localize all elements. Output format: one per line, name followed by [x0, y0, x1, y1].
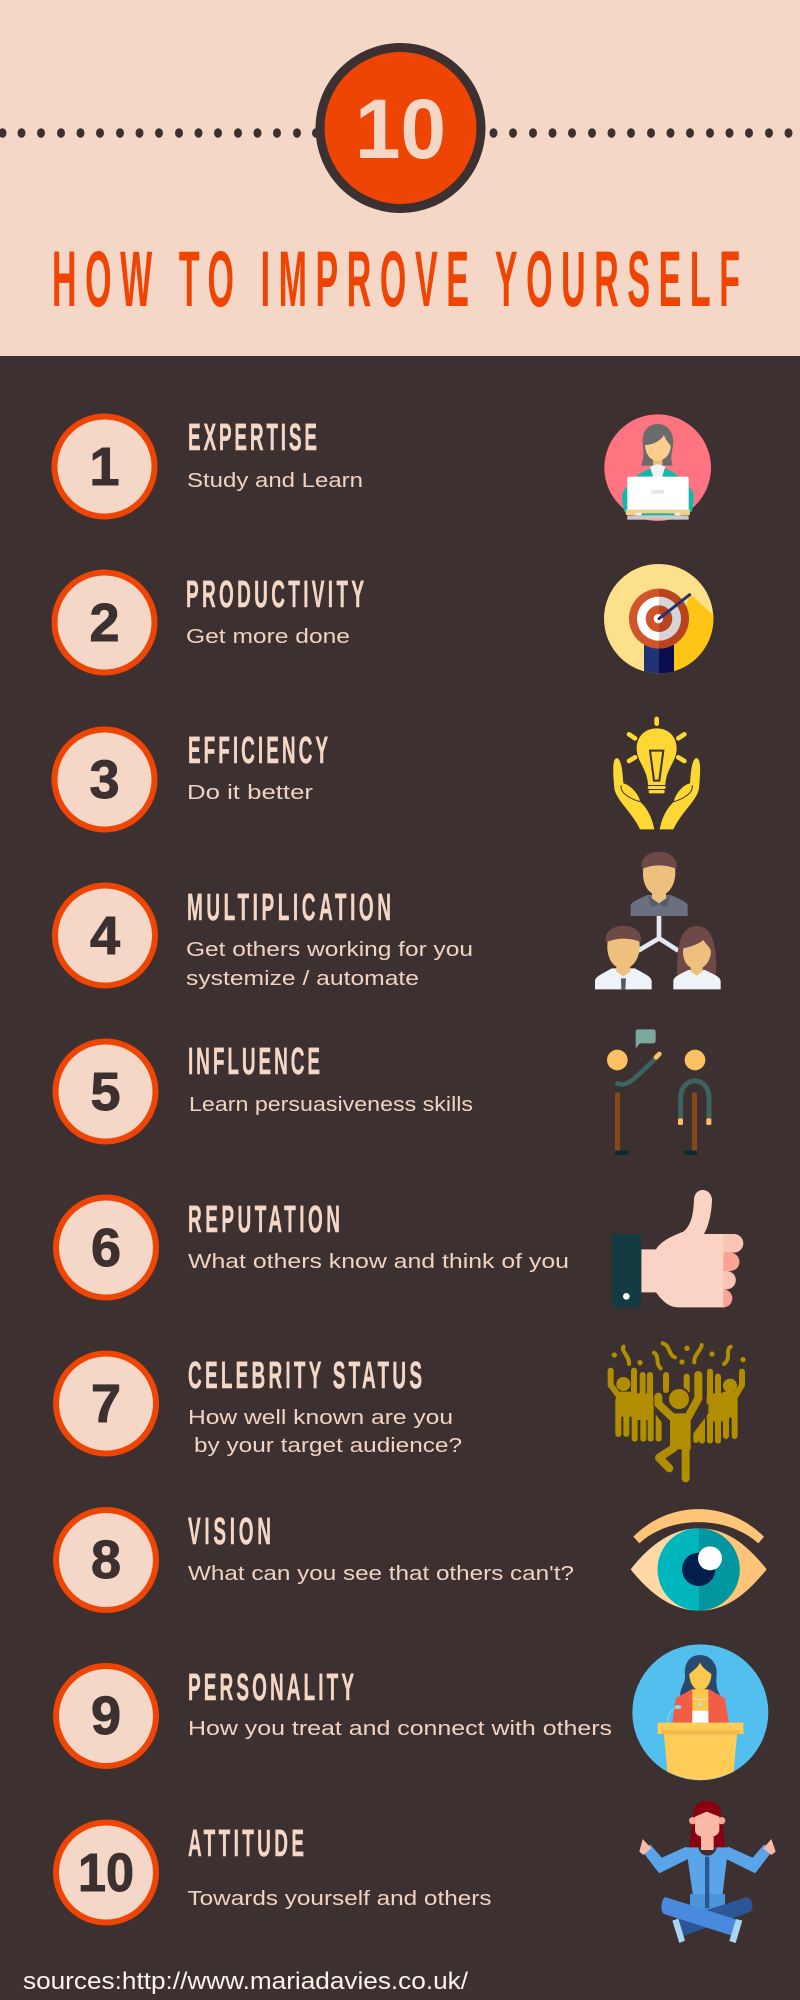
text: systemize automate: systemize / automate [186, 968, 419, 990]
badge: big number 10 [320, 48, 481, 208]
number badge 10: 10 [78, 1843, 134, 1903]
icon: eye [631, 1509, 767, 1611]
icon: woman with laptop [604, 414, 711, 521]
heading: productivity: PRODUCTIVITY [186, 574, 364, 616]
text: how well known: How well known are you [188, 1407, 453, 1429]
number badge 10 [56, 1822, 156, 1922]
number badge 1: 1 [89, 437, 120, 497]
item 7: celebrity status [56, 1354, 462, 1457]
heading: attitude: ATTITUDE [188, 1823, 304, 1865]
number badge 8 [56, 1510, 156, 1610]
number badge 4: 4 [90, 906, 120, 966]
icon: meditating woman [639, 1801, 776, 1943]
item 3: efficiency [54, 730, 328, 830]
item 4: multiplication [55, 886, 473, 990]
heading: influence: INFLUENCE [188, 1041, 320, 1083]
text: learn persuasiveness skills: Learn persuasiveness skills [189, 1094, 473, 1116]
panel: header background [0, 0, 800, 356]
text: get more done: Get more done [186, 626, 350, 648]
number badge 3: 3 [89, 750, 120, 810]
text: get others working for you: Get others working for you [186, 939, 473, 961]
number badge 6: 6 [91, 1218, 121, 1278]
heading: vision: VISION [188, 1511, 271, 1553]
number badge 6 [56, 1198, 156, 1298]
dotted line [0, 128, 792, 138]
title: HOW TO IMPROVE YOURSELF [52, 235, 740, 323]
number badge 5 [56, 1042, 156, 1142]
number badge 8: 8 [91, 1530, 121, 1590]
icon: light bulb in hands [613, 719, 700, 829]
item 6: reputation [56, 1198, 569, 1298]
icon: target with arrow [604, 564, 713, 673]
heading: multiplication: MULTIPLICATION [187, 887, 391, 929]
heading: personality: PERSONALITY [188, 1667, 354, 1709]
icon: woman at podium [632, 1644, 768, 1780]
text: by your target audience: by your target audience? [194, 1435, 462, 1457]
item 2: productivity [54, 572, 364, 672]
number badge 9: 9 [91, 1686, 121, 1746]
icon: team hierarchy [595, 852, 721, 989]
number badge 9 [56, 1666, 156, 1766]
text: study and learn: Study and Learn [187, 470, 363, 492]
heading: celebrity status: CELEBRITY STATUS [188, 1355, 422, 1397]
number badge 3 [54, 730, 154, 830]
number badge 5: 5 [90, 1062, 121, 1122]
number badge 2 [54, 572, 154, 672]
number badge 7 [56, 1354, 156, 1454]
item 10: attitude [56, 1822, 492, 1922]
item 5: influence [56, 1041, 473, 1142]
text: towards yourself: Towards yourself and others [188, 1888, 492, 1910]
icon: two people talking [607, 1029, 711, 1155]
number badge 4 [55, 886, 155, 986]
text: what can you see: What can you see that others can't? [188, 1563, 574, 1585]
heading: expertise: EXPERTISE [188, 417, 317, 459]
heading: reputation: REPUTATION [188, 1199, 340, 1241]
item 1: expertise [54, 416, 363, 516]
text: what others know: What others know and think of you [188, 1251, 569, 1273]
number badge 7: 7 [91, 1374, 121, 1434]
icon: thumbs up [612, 1190, 743, 1307]
text: how you treat: How you treat and connect with others [188, 1718, 612, 1740]
number badge 2: 2 [89, 593, 120, 653]
item 8: vision [56, 1510, 574, 1610]
icon: celebrating crowd [611, 1343, 746, 1478]
source line: sources:http://www.mariadavies.co.uk/ [23, 1968, 468, 1995]
heading: efficiency: EFFICIENCY [188, 730, 328, 772]
item 9: personality [56, 1666, 612, 1766]
badge: big number 10: 10 [355, 82, 446, 176]
text: do it better: Do it better [187, 782, 313, 804]
number badge 1 [54, 416, 154, 516]
